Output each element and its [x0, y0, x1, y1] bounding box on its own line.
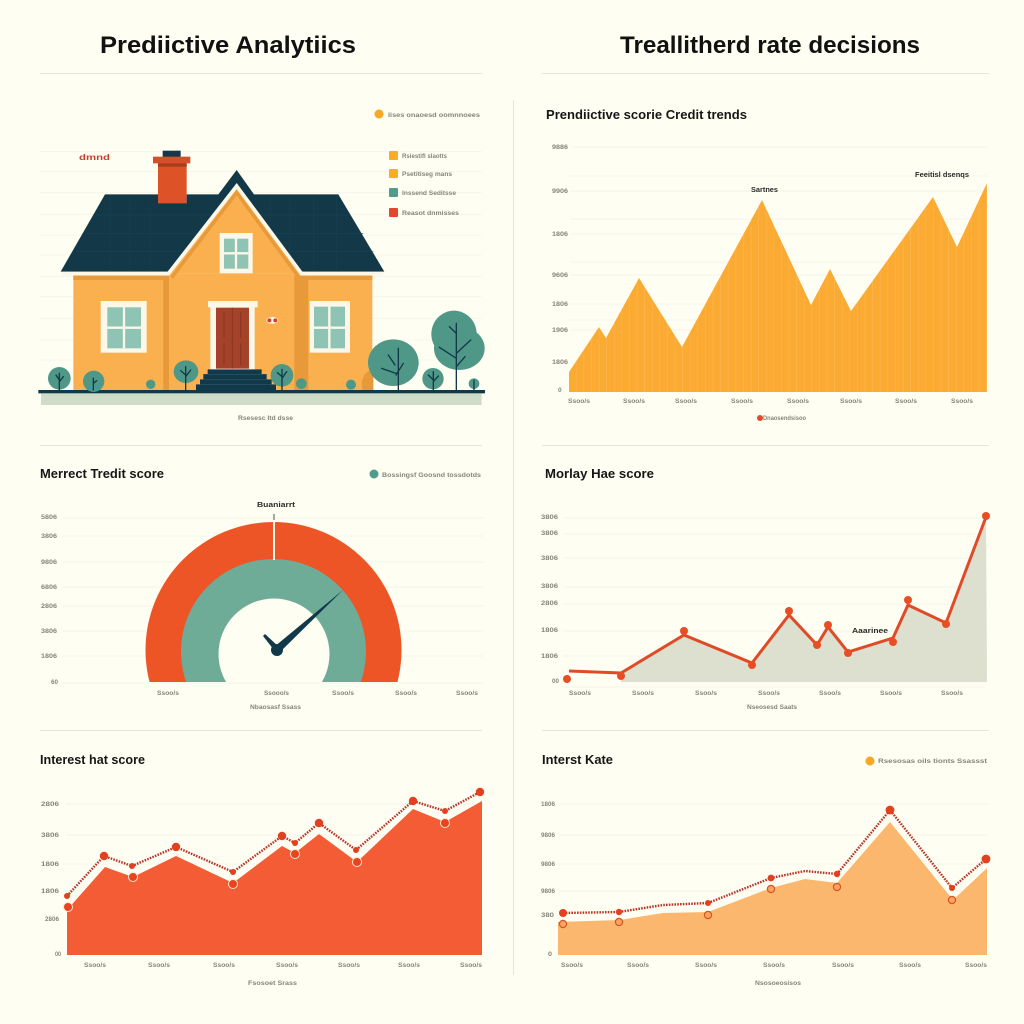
y axis labels: 9806	[541, 888, 555, 895]
x axis labels	[568, 398, 973, 405]
x axis labels: Ssoo/s	[965, 962, 987, 969]
y axis labels: 3806	[541, 583, 558, 590]
x axis labels: Ssoo/s	[632, 690, 654, 697]
x axis labels: Ssoo/s	[338, 962, 360, 969]
forecast points	[559, 806, 990, 917]
caption: Nsosoeosisos	[755, 980, 801, 987]
y axis labels: 1806	[552, 301, 568, 308]
y axis labels: 1806	[552, 231, 568, 238]
y axis labels: 2806	[45, 916, 59, 923]
x axis labels: Ssoo/s	[880, 690, 902, 697]
y axis labels	[41, 514, 58, 686]
y axis labels: 00	[552, 678, 559, 685]
annotations	[751, 170, 969, 194]
caption: house: Rsesesc Itd dsse	[238, 415, 293, 422]
x axis labels: Ssoo/s	[758, 690, 780, 697]
y axis labels: 1806	[541, 653, 558, 660]
y axis labels: 60	[51, 679, 58, 686]
x axis labels: Ssoo/s	[623, 398, 645, 405]
y axis labels: 6806	[41, 584, 57, 591]
y axis labels: 1806	[541, 627, 558, 634]
right window	[310, 301, 350, 353]
title: Predictive Analytics: Prediictive Analytiics	[100, 32, 356, 59]
x axis labels: Ssoo/s	[941, 690, 963, 697]
x axis labels: Ssoo/s	[627, 962, 649, 969]
x axis labels: Ssoo/s	[213, 962, 235, 969]
y axis labels: 1806	[41, 861, 59, 868]
y axis labels: 9806	[41, 559, 57, 566]
house number sign	[266, 317, 278, 324]
door	[210, 305, 255, 370]
x axis labels: Ssoo/s	[332, 690, 354, 697]
annotations: Feeitisl dsenqs	[915, 170, 969, 179]
x axis labels: Ssoo/s	[561, 962, 583, 969]
x axis labels: Ssoo/s	[695, 962, 717, 969]
legend: house: Inssend Seditsse	[402, 190, 456, 197]
y axis labels: 2806	[41, 801, 59, 808]
legend: house: Rsiestifl slaotts	[402, 153, 447, 160]
steps	[196, 369, 276, 393]
y axis labels: 1806	[552, 359, 568, 366]
x axis labels: Ssoo/s	[819, 690, 841, 697]
gable window	[220, 233, 253, 273]
x axis labels: Ssoo/s	[148, 962, 170, 969]
label: gauge top: Buaniarrt	[257, 500, 296, 509]
line series	[569, 517, 986, 673]
x axis labels: Ssoo/s	[157, 690, 179, 697]
panel: interest rate area chart	[541, 752, 990, 987]
x axis labels: Ssoo/s	[787, 398, 809, 405]
x axis labels	[569, 690, 963, 697]
y axis labels	[552, 144, 568, 394]
label: red annotation: dmnd	[79, 153, 110, 162]
heading: Interst Kate	[542, 752, 613, 767]
y axis labels: 5806	[41, 514, 57, 521]
legend	[866, 756, 988, 766]
y axis labels: 3806	[541, 530, 558, 537]
y axis labels: 3806	[541, 555, 558, 562]
y axis labels: 9886	[552, 144, 568, 151]
x axis labels: Ssoo/s	[395, 690, 417, 697]
panel: house illustration	[38, 110, 485, 422]
legend: house: Iises onaoesd oomnnoees	[388, 112, 480, 119]
y axis labels: 1806	[41, 653, 57, 660]
y axis labels: 0	[558, 387, 562, 394]
data points	[563, 512, 990, 683]
y axis labels: 9806	[541, 832, 555, 839]
heading: Interest hat score	[40, 752, 145, 767]
panel: mortgage rate line chart	[541, 466, 990, 711]
y axis labels: 3806	[41, 628, 57, 635]
area series	[558, 822, 987, 955]
dashed forecast line	[67, 792, 480, 896]
y axis labels: 1806	[41, 888, 59, 895]
legend: house: Psetitiseg mans	[402, 171, 452, 178]
shrubs and trees	[362, 368, 373, 390]
ringed area points	[559, 883, 956, 928]
y axis labels: 9906	[552, 188, 568, 195]
heading: Morlay Hae score	[545, 466, 654, 481]
y axis labels: 0	[548, 951, 552, 958]
x axis labels: Ssoo/s	[460, 962, 482, 969]
x axis labels: Ssoo/s	[899, 962, 921, 969]
x axis labels: Ssoo/s	[895, 398, 917, 405]
annotations: Sartnes	[751, 185, 778, 194]
x axis labels	[157, 690, 478, 697]
heading: Prendiictive scorie Credit trends	[546, 107, 747, 122]
x axis labels: Ssoo/s	[84, 962, 106, 969]
x axis labels: Ssoo/s	[276, 962, 298, 969]
forecast points	[64, 788, 484, 899]
x axis labels: Ssoo/s	[398, 962, 420, 969]
x axis labels: Ssoo/s	[763, 962, 785, 969]
caption: Nseosesd Saats	[747, 704, 797, 711]
heading: Merrect Tredit score	[40, 466, 164, 481]
y axis labels: 380	[541, 912, 554, 919]
dashed forecast line	[563, 810, 986, 913]
x axis labels: Ssoo/s	[568, 398, 590, 405]
y axis labels: 9606	[552, 272, 568, 279]
panel: interest score area chart	[40, 752, 484, 987]
x axis labels: Ssooo/s	[264, 690, 289, 697]
x axis labels	[561, 962, 987, 969]
y axis labels: 9806	[541, 861, 555, 868]
y axis labels: 3806	[41, 832, 59, 839]
y axis labels: 2806	[541, 600, 558, 607]
y axis labels: 2806	[41, 603, 57, 610]
y axis labels	[541, 514, 559, 685]
legend: Rsesosas oils tionts Ssassst	[878, 758, 988, 765]
icon: house and garden	[38, 151, 485, 405]
area series	[569, 183, 987, 392]
caption: Dnaosendsisoo	[763, 415, 806, 422]
legend: house: Reasot dnmisses	[402, 210, 459, 217]
caption: Fsosoet Srass	[248, 980, 297, 987]
ringed area points	[64, 818, 450, 912]
x axis labels: Ssoo/s	[840, 398, 862, 405]
y axis labels	[541, 801, 555, 958]
x axis labels: Ssoo/s	[569, 690, 591, 697]
panel: credit trends area chart	[546, 107, 987, 422]
x axis labels: Ssoo/s	[695, 690, 717, 697]
x axis labels: Ssoo/s	[675, 398, 697, 405]
y axis labels	[41, 801, 61, 958]
gauge	[146, 514, 402, 682]
x axis labels: Ssoo/s	[832, 962, 854, 969]
needle	[263, 590, 343, 653]
area series	[67, 801, 482, 955]
legend	[370, 470, 481, 479]
x axis labels: Ssoo/s	[456, 690, 478, 697]
title: rate decisions: Treallitherd rate decisions	[620, 32, 920, 59]
x axis labels: Ssoo/s	[951, 398, 973, 405]
area under line	[621, 517, 987, 682]
left window	[101, 301, 147, 353]
legend: house	[374, 110, 480, 217]
legend: Bossingsf Goosnd tossdotds	[382, 472, 481, 479]
y axis labels: 1806	[541, 801, 555, 808]
y axis labels: 3806	[41, 533, 57, 540]
y axis labels: 00	[55, 951, 61, 958]
caption: Nbaosasf Ssass	[250, 704, 301, 711]
panel: credit score gauge	[40, 468, 483, 709]
y axis labels: 1906	[552, 327, 568, 334]
annotation: Aaarinee	[852, 626, 888, 635]
y axis labels: 3806	[541, 514, 558, 521]
x axis labels	[84, 962, 482, 969]
x axis labels: Ssoo/s	[731, 398, 753, 405]
